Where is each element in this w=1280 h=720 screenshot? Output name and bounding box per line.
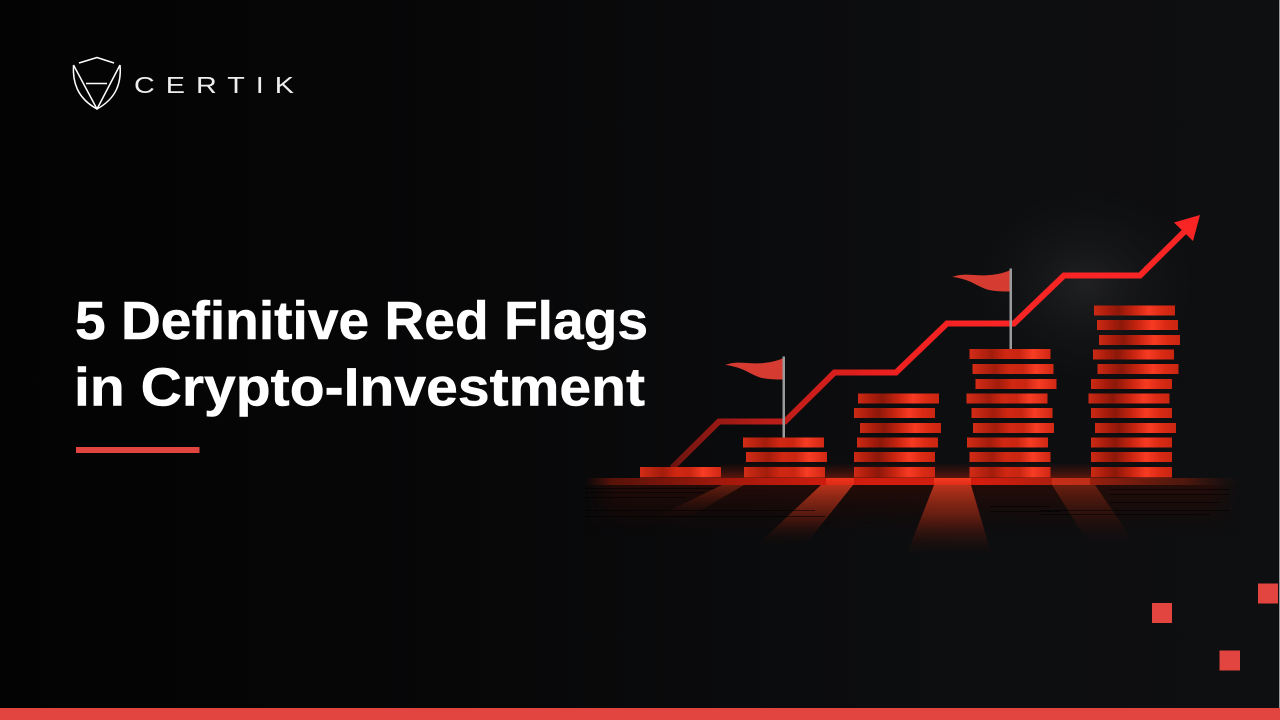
logo: CertiK — [73, 58, 305, 109]
title — [74, 291, 648, 418]
arrowhead — [1174, 215, 1200, 241]
bottom bar — [0, 708, 1280, 720]
coin stack 3 — [854, 394, 941, 478]
floor band — [585, 478, 1240, 485]
floor light and rays — [588, 465, 1230, 547]
icon: shield — [73, 58, 120, 109]
glow behind coin stacks — [970, 190, 1200, 380]
scan lines — [585, 488, 1230, 517]
title: in Crypto-Investment — [74, 358, 645, 418]
title underline — [76, 447, 200, 453]
glow above floor — [721, 463, 1091, 478]
coin stack 5 — [1088, 306, 1180, 478]
flag 1 — [725, 356, 785, 438]
coin stack 1 — [640, 467, 721, 478]
title: 5 Definitive Red Flags — [75, 291, 648, 351]
rays — [906, 485, 992, 556]
right edge strip — [1279, 0, 1280, 708]
coin stack 4 — [966, 349, 1056, 478]
rising line with arrow — [672, 215, 1200, 468]
decorative squares — [1152, 584, 1278, 670]
flag 2 — [952, 268, 1012, 350]
wordmark: CERTIK — [134, 72, 305, 98]
coin stack 2 — [743, 438, 827, 478]
